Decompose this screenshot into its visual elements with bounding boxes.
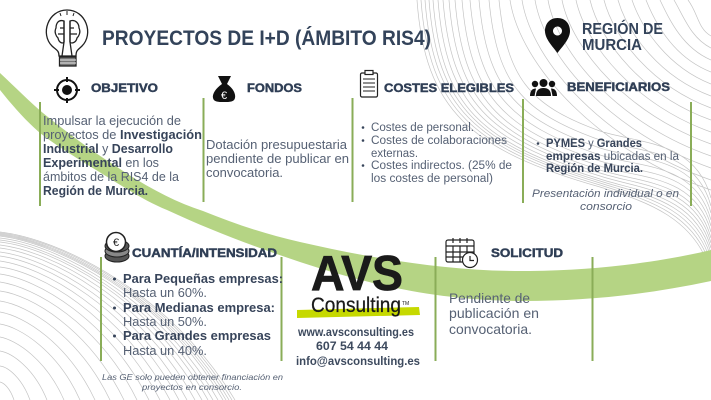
title: PROYECTOS DE I+D (ÁMBITO RIS4) (102, 27, 431, 50)
panel: beneficiarios (530, 79, 691, 213)
list: costes: los costes de personal) (371, 173, 493, 185)
panel: costes elegibles (360, 70, 523, 203)
text: objetivo: proyectos de Investigación (43, 128, 202, 142)
text: fondos: pendiente de publicar en (206, 152, 349, 166)
panel: fondos (206, 76, 352, 202)
text: fondos (206, 138, 349, 180)
panel: objetivo (40, 77, 204, 206)
text: fondos: convocatoria. (206, 166, 283, 180)
logo: AVS Consulting: TM (402, 301, 409, 307)
heading: costes elegibles: COSTES ELEGIBLES (384, 81, 514, 95)
text: solicitud: publicación en (449, 305, 539, 321)
text: solicitud: Pendiente de (449, 290, 530, 306)
icon: coins: € (113, 237, 119, 249)
list: cuantia (113, 271, 283, 358)
icon: location pin (545, 18, 570, 53)
text: objetivo: Experimental en los (43, 156, 159, 170)
list: costes (362, 122, 512, 185)
list: cuantia: Para Pequeñas empresas: (123, 271, 283, 286)
list: cuantia: Hasta un 40%. (123, 343, 207, 358)
list: beneficiarios: Región de Murcia. (546, 163, 643, 175)
icon: money bag: € (221, 90, 227, 102)
note: presentacion (532, 188, 679, 213)
list: beneficiarios: PYMES y Grandes (546, 138, 642, 150)
list: cuantia: Para Grandes empresas (123, 328, 271, 343)
list: beneficiarios: empresas ubicadas en la (546, 151, 680, 163)
background wave lines: bottom left (0, 232, 235, 400)
list: costes: externas. (371, 148, 418, 160)
list: costes: Costes de colaboraciones (371, 135, 507, 147)
list: cuantia: Hasta un 60%. (123, 285, 207, 300)
note: presentacion: Presentación individual o en (532, 188, 679, 200)
logo: AVS Consulting: Consulting (311, 294, 401, 317)
region heading: MURCIA (582, 37, 642, 54)
list: costes: Costes indirectos. (25% de (371, 160, 512, 172)
icon: money bag (213, 76, 235, 102)
text: objetivo (43, 114, 202, 198)
heading: cuantia: CUANTÍA/INTENSIDAD (132, 245, 277, 260)
contact details: info@avsconsulting.es (296, 354, 420, 368)
note: grandes empresas: Las GE solo pueden obtener financiación en (102, 372, 283, 382)
text: solicitud: convocatoria. (449, 321, 532, 337)
panel: solicitud (436, 238, 592, 361)
text: fondos: Dotación presupuestaria (206, 138, 347, 152)
text: objetivo: Industrial y Desarrollo (43, 142, 173, 156)
region heading (582, 20, 663, 54)
icon: clipboard (360, 70, 378, 97)
icon: calendar with clock (446, 238, 478, 268)
icon: target (54, 77, 80, 103)
text: objetivo: Impulsar la ejecución de (43, 114, 181, 128)
contact details (296, 325, 420, 368)
list: cuantia: Hasta un 50%. (123, 314, 207, 329)
icon: coins (105, 232, 129, 262)
note: presentacion: consorcio (580, 201, 632, 213)
logo: AVS Consulting: AVS (311, 247, 403, 301)
icon: people (530, 79, 557, 96)
contact details: www.avsconsulting.es (297, 325, 414, 339)
green swoosh band (0, 73, 711, 301)
heading: objetivo: OBJETIVO (91, 81, 158, 95)
note: grandes empresas (102, 372, 283, 392)
background wave lines: top right (417, 0, 711, 273)
text: objetivo: ámbitos de la RIS4 de la (43, 170, 179, 184)
region heading: REGIÓN DE (582, 20, 663, 38)
heading: solicitud: SOLICITUD (491, 246, 563, 260)
text: solicitud (449, 290, 539, 337)
list: cuantia: Para Medianas empresa: (123, 300, 275, 315)
text: objetivo: Región de Murcia. (43, 184, 148, 198)
icon: light bulb with brain (46, 10, 88, 66)
note: grandes empresas: proyectos en consorcio. (141, 382, 242, 392)
contact details: 607 54 44 44 (316, 339, 388, 353)
heading: beneficiarios: BENEFICIARIOS (567, 80, 670, 94)
list: beneficiarios (537, 138, 680, 175)
heading: fondos: FONDOS (247, 81, 302, 95)
list: costes: Costes de personal. (371, 122, 474, 134)
panel: cuantia / intensidad (101, 232, 283, 392)
logo: AVS Consulting (297, 247, 420, 318)
